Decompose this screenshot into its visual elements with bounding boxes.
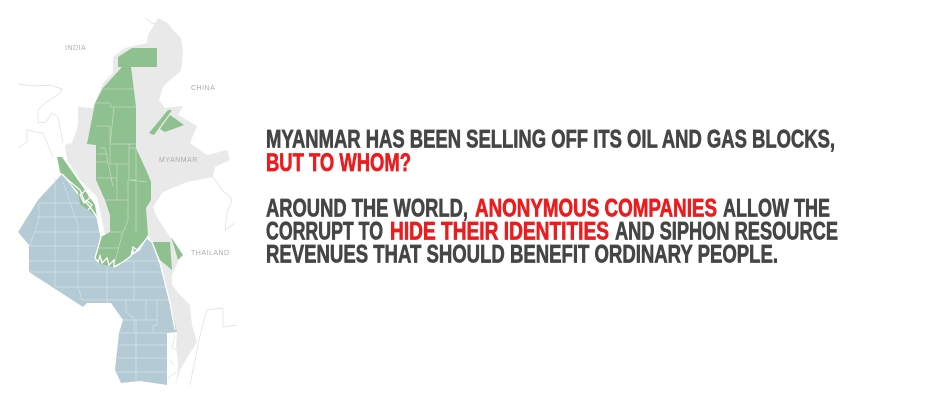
- label: Myanmar: MYANMAR: [159, 157, 198, 164]
- text block: explanation: HIDE THEIR IDENTITIES: [390, 218, 609, 246]
- land: Myanmar: [65, 18, 230, 385]
- text block: explanation: REVENUES THAT SHOULD BENEFIT ORDINARY PEOPLE.: [266, 240, 778, 268]
- oil and gas blocks: offshore (blue): [18, 174, 177, 385]
- neighbouring country borders: [18, 18, 237, 385]
- text block: explanation: CORRUPT TO: [266, 218, 383, 246]
- text block: explanation: ALLOW THE: [723, 194, 830, 222]
- oil and gas blocks: onshore (green): [57, 48, 184, 270]
- coastline: [62, 174, 175, 330]
- label: Thailand: THAILAND: [191, 250, 230, 257]
- text block: explanation: [266, 194, 838, 268]
- heading: question: [266, 126, 835, 177]
- islands on the coast: [80, 190, 92, 210]
- label: China: CHINA: [191, 85, 215, 92]
- heading: question: BUT TO WHOM?: [266, 149, 411, 177]
- text block: explanation: ANONYMOUS COMPANIES: [475, 194, 717, 222]
- label: India: INDIA: [65, 45, 86, 52]
- text block: explanation: AND SIPHON RESOURCE: [615, 218, 838, 246]
- map of Myanmar: [18, 18, 237, 385]
- text block: explanation: AROUND THE WORLD,: [266, 194, 468, 222]
